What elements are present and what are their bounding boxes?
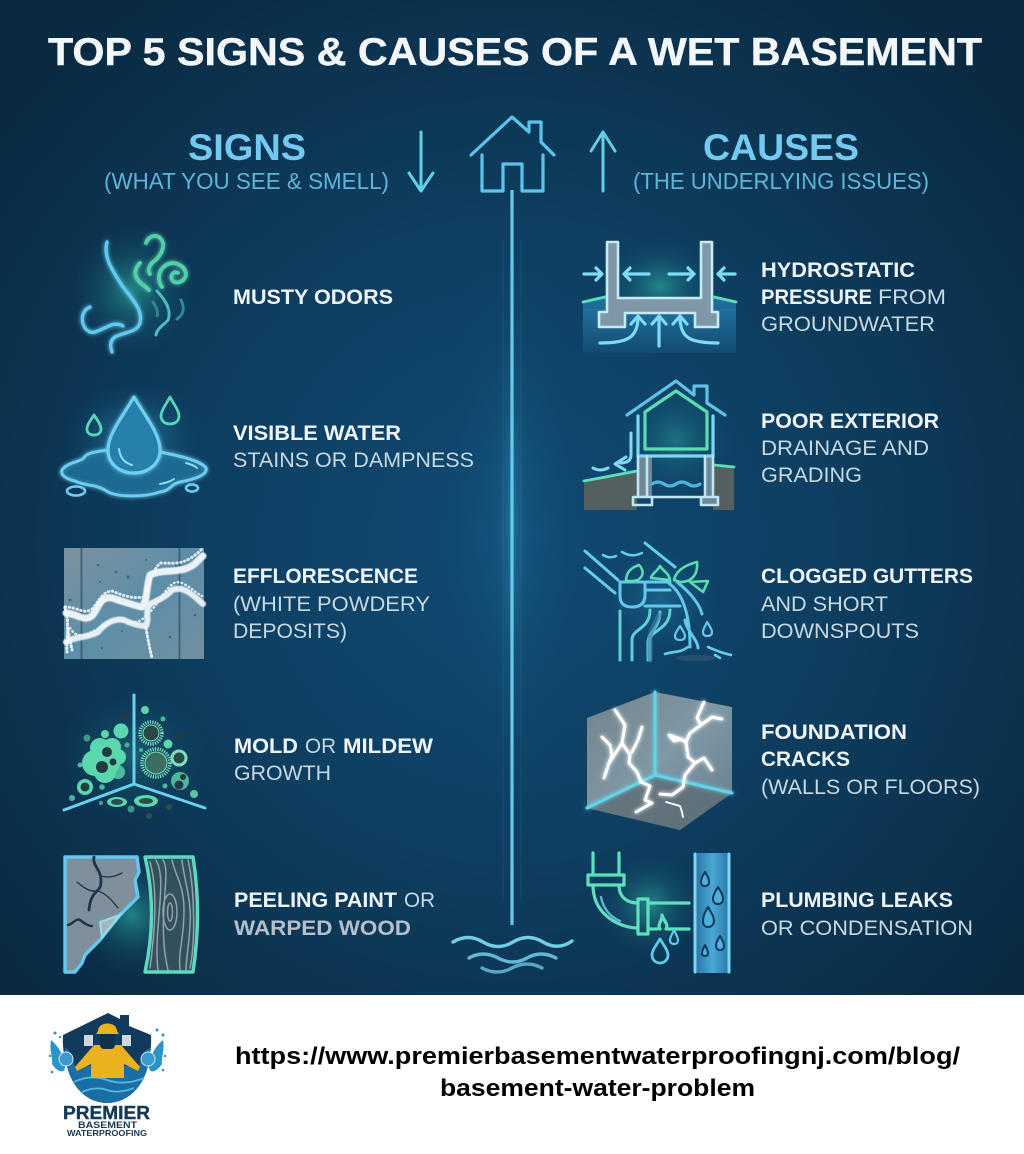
footer logo xyxy=(49,1013,166,1138)
footer url: basement-water-problem xyxy=(440,1075,755,1102)
label xyxy=(761,410,939,487)
icon: cracked foundation corner xyxy=(587,692,732,830)
central line with glow xyxy=(442,190,582,925)
label: MILDEW xyxy=(343,735,433,758)
label: PEELING PAINT xyxy=(234,889,397,912)
label: CLOGGED GUTTERS xyxy=(761,565,973,588)
icon: leaking pipe xyxy=(588,853,729,973)
label xyxy=(233,565,430,643)
footer url xyxy=(235,1043,960,1102)
label: GROUNDWATER xyxy=(761,313,935,336)
arrow: signs down xyxy=(409,132,433,191)
panel: signs xyxy=(58,224,474,975)
logo wordmark: BASEMENT xyxy=(78,1120,137,1131)
label: PRESSURE xyxy=(761,286,872,309)
heading: causes: (THE UNDERLYING ISSUES) xyxy=(633,168,929,194)
cause 4: foundation cracks xyxy=(587,692,980,830)
label: (WHITE POWDERY xyxy=(233,593,430,616)
icon: nose and odor xyxy=(70,224,194,356)
label: DEPOSITS) xyxy=(233,620,347,643)
label xyxy=(234,889,435,940)
cause 5: plumbing leaks xyxy=(588,853,973,973)
icon: water drop and puddle xyxy=(62,382,206,498)
heading: signs xyxy=(104,127,389,194)
label: PLUMBING LEAKS xyxy=(761,889,953,912)
label: GRADING xyxy=(761,464,862,487)
label xyxy=(761,565,973,643)
footer background xyxy=(0,995,1024,1154)
label: STAINS OR DAMPNESS xyxy=(233,449,474,472)
cause 3: clogged gutters xyxy=(585,543,973,661)
sign 2: visible water xyxy=(62,382,474,498)
sign 4: mold xyxy=(58,689,433,821)
label: MOLD xyxy=(234,735,298,758)
label xyxy=(761,721,980,799)
icon: peeling paint and warped wood xyxy=(65,855,198,975)
cause 2: poor drainage xyxy=(584,380,939,510)
label: OR xyxy=(404,889,435,912)
label: WARPED WOOD xyxy=(234,917,411,940)
logo wordmark: WATERPROOFING xyxy=(67,1128,147,1138)
heading: causes: CAUSES xyxy=(703,127,859,168)
label: DOWNSPOUTS xyxy=(761,620,919,643)
sign 1: musty odors xyxy=(70,224,393,356)
label: FROM xyxy=(878,286,946,309)
arrow: causes up xyxy=(591,132,615,191)
label: HYDROSTATIC xyxy=(761,259,915,282)
footer url: https://www.premierbasementwaterproofingnj.com/blog/ xyxy=(235,1043,960,1070)
label: OR CONDENSATION xyxy=(761,917,973,940)
logo emblem xyxy=(49,1013,166,1103)
heading: signs: (WHAT YOU SEE & SMELL) xyxy=(104,168,389,194)
icon: house xyxy=(471,117,554,191)
heading: signs: SIGNS xyxy=(188,127,306,168)
label: CRACKS xyxy=(761,748,850,771)
heading: causes xyxy=(633,127,929,194)
label: VISIBLE WATER xyxy=(233,422,401,445)
icon: efflorescence wall xyxy=(64,548,204,659)
logo wordmark xyxy=(63,1103,150,1138)
icon: house drainage xyxy=(584,380,734,510)
label: AND SHORT xyxy=(761,593,888,616)
label: (WALLS OR FLOORS) xyxy=(761,776,980,799)
icon: water waves xyxy=(453,938,572,972)
title: TOP 5 SIGNS & CAUSES OF A WET BASEMENT xyxy=(48,31,982,74)
icon: mold corner xyxy=(58,689,210,821)
cause 1: hydrostatic pressure xyxy=(583,236,946,353)
panel: causes xyxy=(583,236,980,973)
label: POOR EXTERIOR xyxy=(761,410,939,433)
logo wordmark: PREMIER xyxy=(63,1103,150,1123)
sign 3: efflorescence xyxy=(64,548,430,659)
sign 5: peeling paint xyxy=(65,855,435,975)
icon: hydrostatic pressure xyxy=(583,236,736,353)
label: MUSTY ODORS xyxy=(233,286,393,309)
label xyxy=(761,889,973,940)
label xyxy=(234,735,433,785)
label: DRAINAGE AND xyxy=(761,437,929,460)
label xyxy=(233,422,474,472)
label xyxy=(761,259,946,336)
label: GROWTH xyxy=(234,762,331,785)
label: EFFLORESCENCE xyxy=(233,565,418,588)
label: FOUNDATION xyxy=(761,721,907,744)
icon: clogged gutter xyxy=(585,543,731,661)
label: OR xyxy=(305,735,336,758)
